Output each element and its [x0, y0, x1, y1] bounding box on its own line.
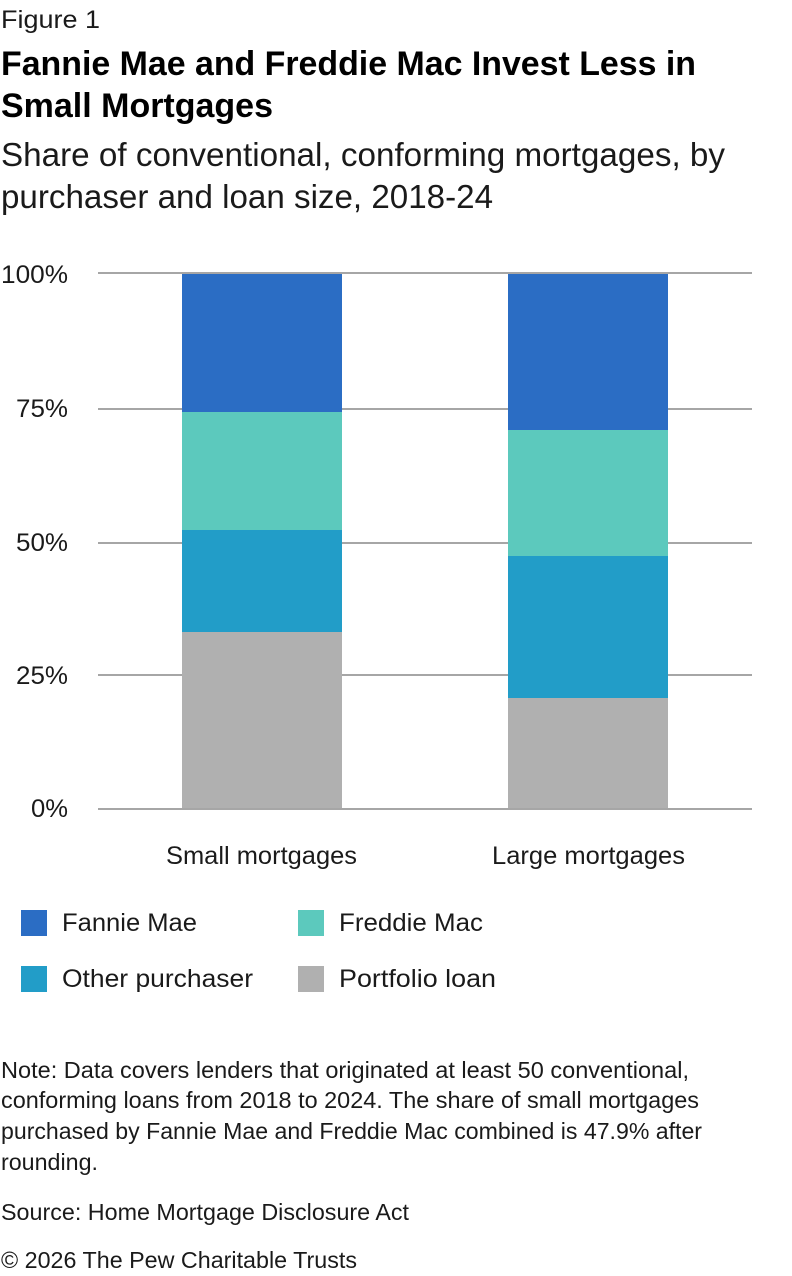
- source: Source: Home Mortgage Disclosure Act: [1, 1199, 410, 1225]
- subtitle: [1, 136, 725, 215]
- title: Fannie Mae and Freddie Mac Invest Less in: [1, 45, 696, 83]
- x axis labels: Small mortgages: [166, 842, 357, 870]
- legend: Fannie Mae: [62, 909, 197, 937]
- title: [1, 45, 696, 125]
- note: rounding.: [1, 1149, 98, 1175]
- note: [1, 1057, 702, 1175]
- subtitle: purchaser and loan size, 2018-24: [1, 178, 493, 215]
- y axis labels: 25%: [16, 662, 68, 690]
- bar: small mortgages: [182, 274, 342, 808]
- y axis labels: 75%: [16, 395, 68, 423]
- legend: Freddie Mac: [339, 909, 483, 937]
- y axis labels: 0%: [31, 795, 68, 823]
- x axis labels: [166, 842, 685, 870]
- stacked bar chart: [1, 261, 752, 870]
- bar: large mortgages: [508, 274, 668, 808]
- figure label: Figure 1: [1, 6, 100, 34]
- title: Small Mortgages: [1, 87, 273, 125]
- note: conforming loans from 2018 to 2024. The share of small mortgages: [1, 1087, 699, 1113]
- y axis labels: 100%: [1, 261, 68, 289]
- legend: Other purchaser: [62, 965, 253, 993]
- legend: [21, 909, 496, 993]
- copyright: © 2026 The Pew Charitable Trusts: [1, 1247, 357, 1273]
- y axis labels: [1, 261, 68, 823]
- x axis labels: Large mortgages: [492, 842, 685, 870]
- legend: Portfolio loan: [339, 965, 496, 993]
- note: Note: Data covers lenders that originated at least 50 conventional,: [1, 1057, 689, 1083]
- subtitle: Share of conventional, conforming mortgages, by: [1, 136, 725, 173]
- note: purchased by Fannie Mae and Freddie Mac combined is 47.9% after: [1, 1118, 702, 1144]
- y axis labels: 50%: [16, 529, 68, 557]
